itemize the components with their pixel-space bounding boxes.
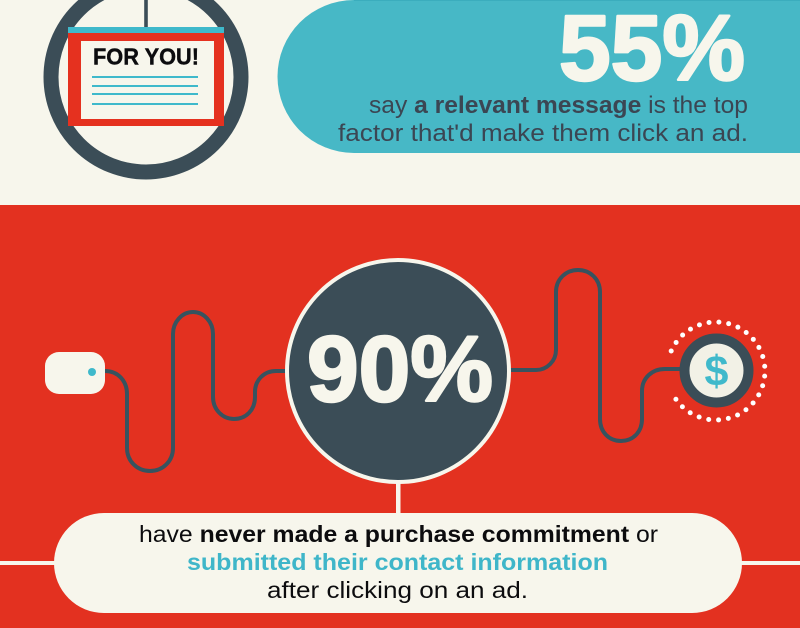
stat description	[338, 92, 748, 147]
panel: teal stat pill	[278, 0, 800, 153]
icon: hanging sign in a circle	[51, 0, 241, 172]
connector lines to callout	[0, 478, 800, 565]
stat description: say a relevant message is the top	[369, 92, 748, 119]
stat description: factor that'd make them click an ad.	[338, 120, 748, 147]
icon: dollar coin with dotted ring	[671, 322, 765, 420]
icon: computer mouse	[45, 352, 105, 394]
sign text lines	[92, 76, 198, 105]
wire: mouse to circle	[105, 312, 290, 471]
panel: red purchase section	[0, 205, 800, 628]
callout: purchase commitment text: have never made a purchase commitment or	[139, 521, 658, 547]
callout: purchase commitment text: submitted their contact information	[187, 549, 608, 575]
sign heading: FOR YOU!	[93, 44, 199, 70]
callout: purchase commitment text	[54, 513, 742, 613]
wire: circle to dollar	[506, 270, 685, 441]
stat circle: 90%: 90%	[307, 317, 493, 421]
panel: top relevant message section	[51, 0, 800, 172]
callout: purchase commitment text: after clicking on an ad.	[267, 577, 528, 603]
stat circle: 90%	[287, 260, 509, 482]
icon: dollar coin with dotted ring: $	[705, 348, 729, 396]
